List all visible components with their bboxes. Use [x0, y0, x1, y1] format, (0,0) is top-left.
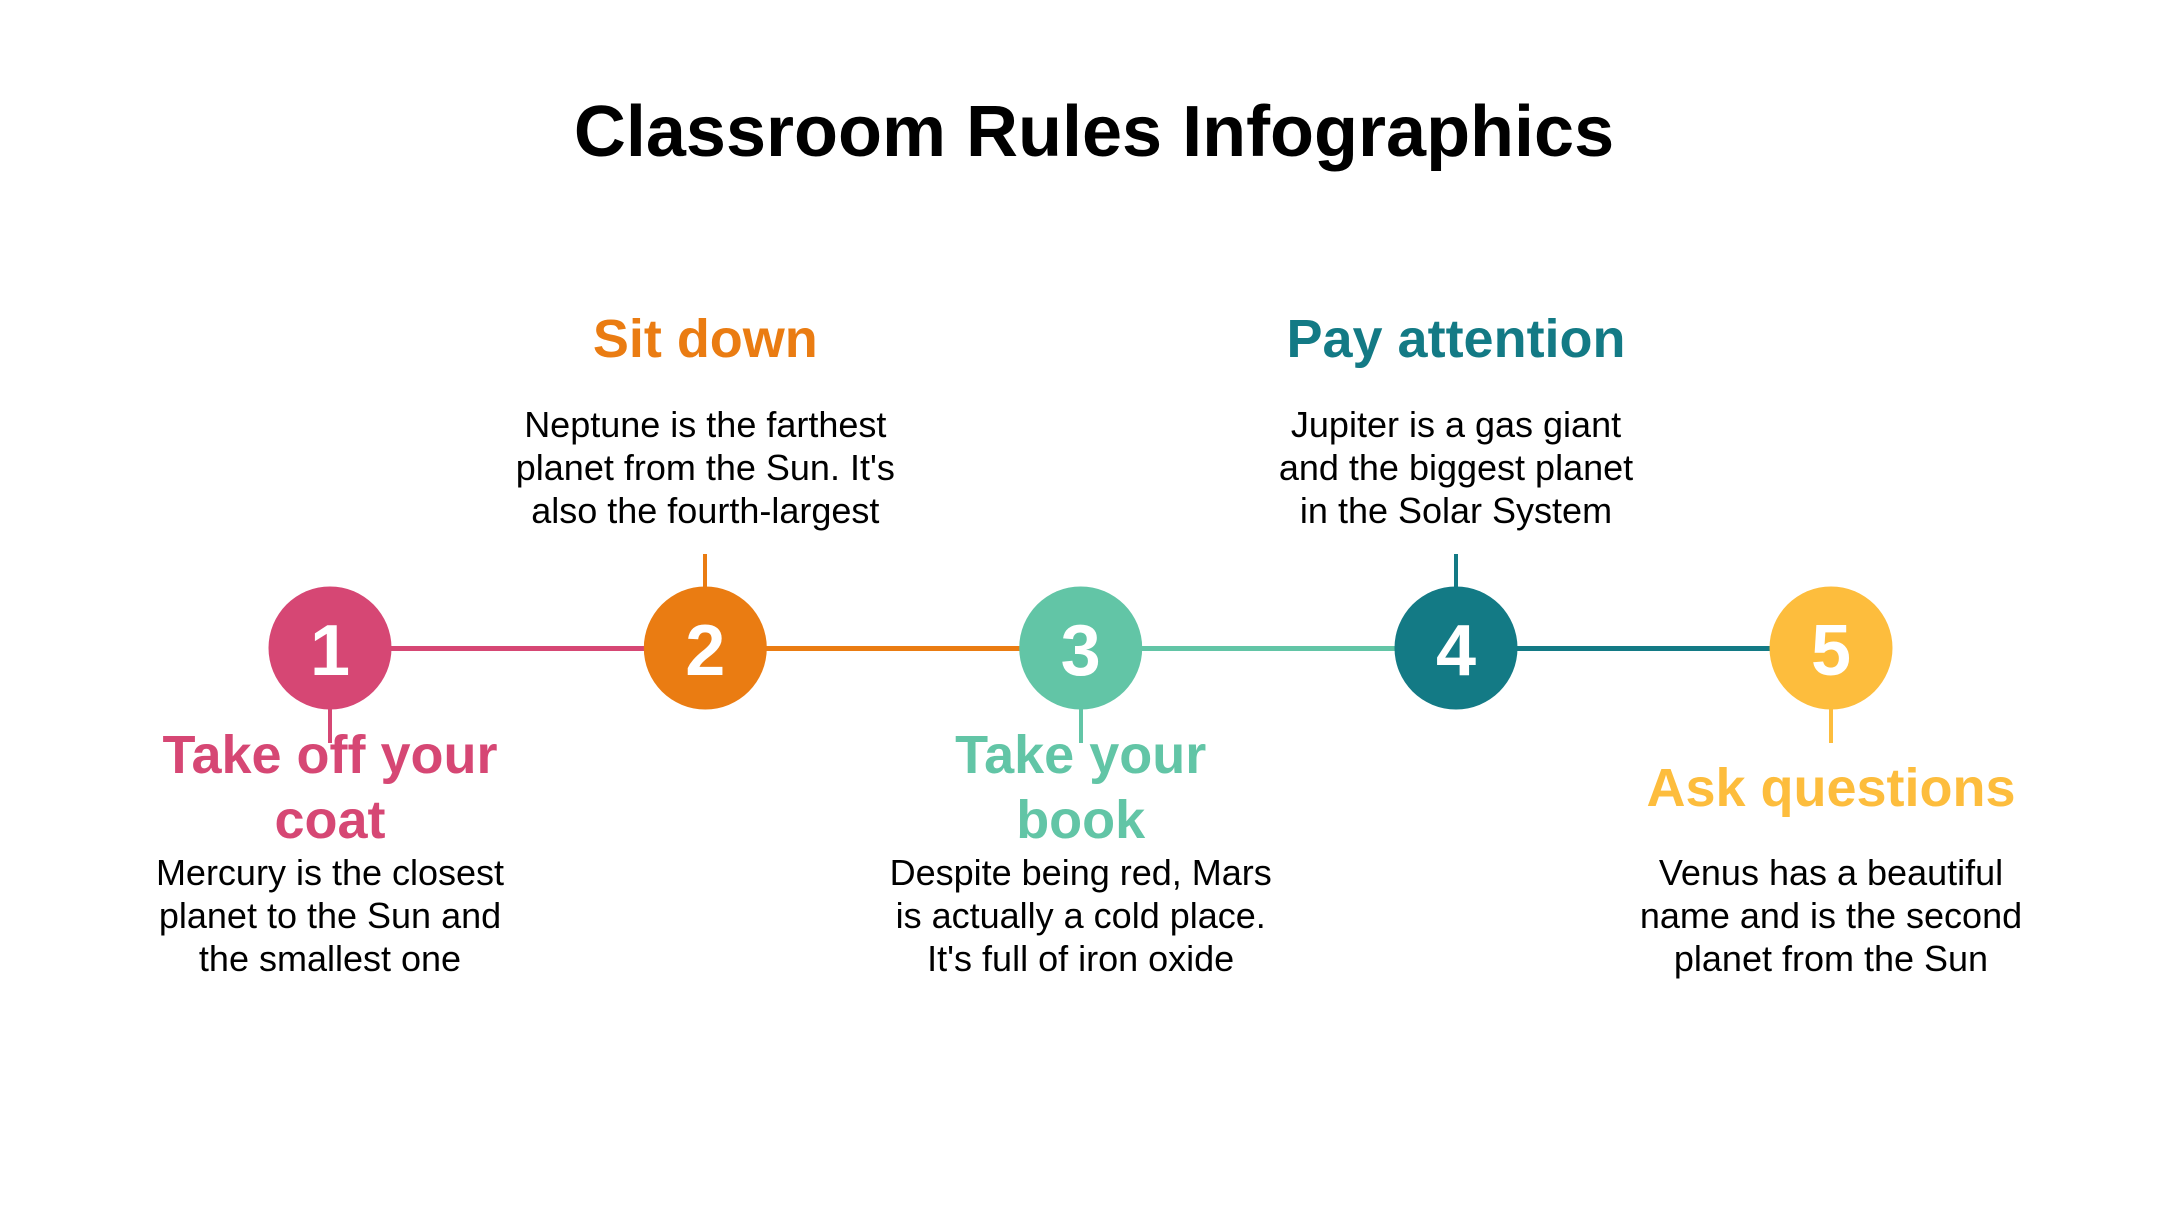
heading 3: book	[1016, 790, 1146, 850]
node 2	[644, 586, 767, 710]
heading 5: Ask questions	[1646, 758, 2016, 818]
body 2: Neptune is the farthest	[524, 404, 886, 445]
number 4: 4	[1436, 611, 1476, 691]
step 2: sit down	[516, 309, 895, 710]
number 2: 2	[685, 611, 725, 691]
body 3: Despite being red, Mars	[890, 852, 1272, 893]
body 4: and the biggest planet	[1279, 447, 1633, 488]
node 5	[1770, 586, 1892, 710]
body 4: in the Solar System	[1300, 490, 1612, 531]
body 5: Venus has a beautiful	[1659, 852, 2003, 893]
connector: 1 to 2	[330, 646, 705, 651]
body 3: is actually a cold place.	[896, 895, 1266, 936]
body 1: planet to the Sun and	[159, 895, 501, 936]
node 3	[1019, 586, 1142, 710]
heading 2: Sit down	[593, 309, 818, 369]
stem 2	[703, 554, 707, 590]
step 3: take your book	[890, 586, 1272, 979]
body 4: Jupiter is a gas giant	[1291, 404, 1621, 445]
stem 3	[1079, 703, 1083, 743]
step 1: take off your coat	[156, 586, 504, 979]
step 4: pay attention	[1279, 309, 1633, 710]
number 1: 1	[310, 611, 350, 691]
title: Classroom Rules Infographics	[574, 92, 1614, 172]
body 1: the smallest one	[199, 938, 461, 979]
node 1	[268, 586, 392, 710]
stem 1	[328, 703, 332, 743]
body 5: name and is the second	[1640, 895, 2022, 936]
node 4	[1394, 586, 1518, 710]
number 3: 3	[1061, 611, 1101, 691]
body 2: planet from the Sun. It's	[516, 447, 895, 488]
body 1: Mercury is the closest	[156, 852, 504, 893]
heading 4: Pay attention	[1286, 309, 1626, 369]
heading 3: Take your	[955, 725, 1206, 785]
body 5: planet from the Sun	[1674, 938, 1988, 979]
connector: 2 to 3	[705, 646, 1081, 651]
step 5: ask questions	[1640, 586, 2022, 979]
body 2: also the fourth-largest	[531, 490, 879, 531]
stem 5	[1829, 703, 1833, 743]
heading 1: coat	[274, 790, 386, 850]
body 3: It's full of iron oxide	[927, 938, 1234, 979]
number 5: 5	[1811, 611, 1851, 691]
heading 1: Take off your	[162, 725, 498, 785]
connector: 4 to 5	[1456, 646, 1831, 651]
stem 4	[1454, 554, 1458, 590]
connector: 3 to 4	[1081, 646, 1456, 651]
